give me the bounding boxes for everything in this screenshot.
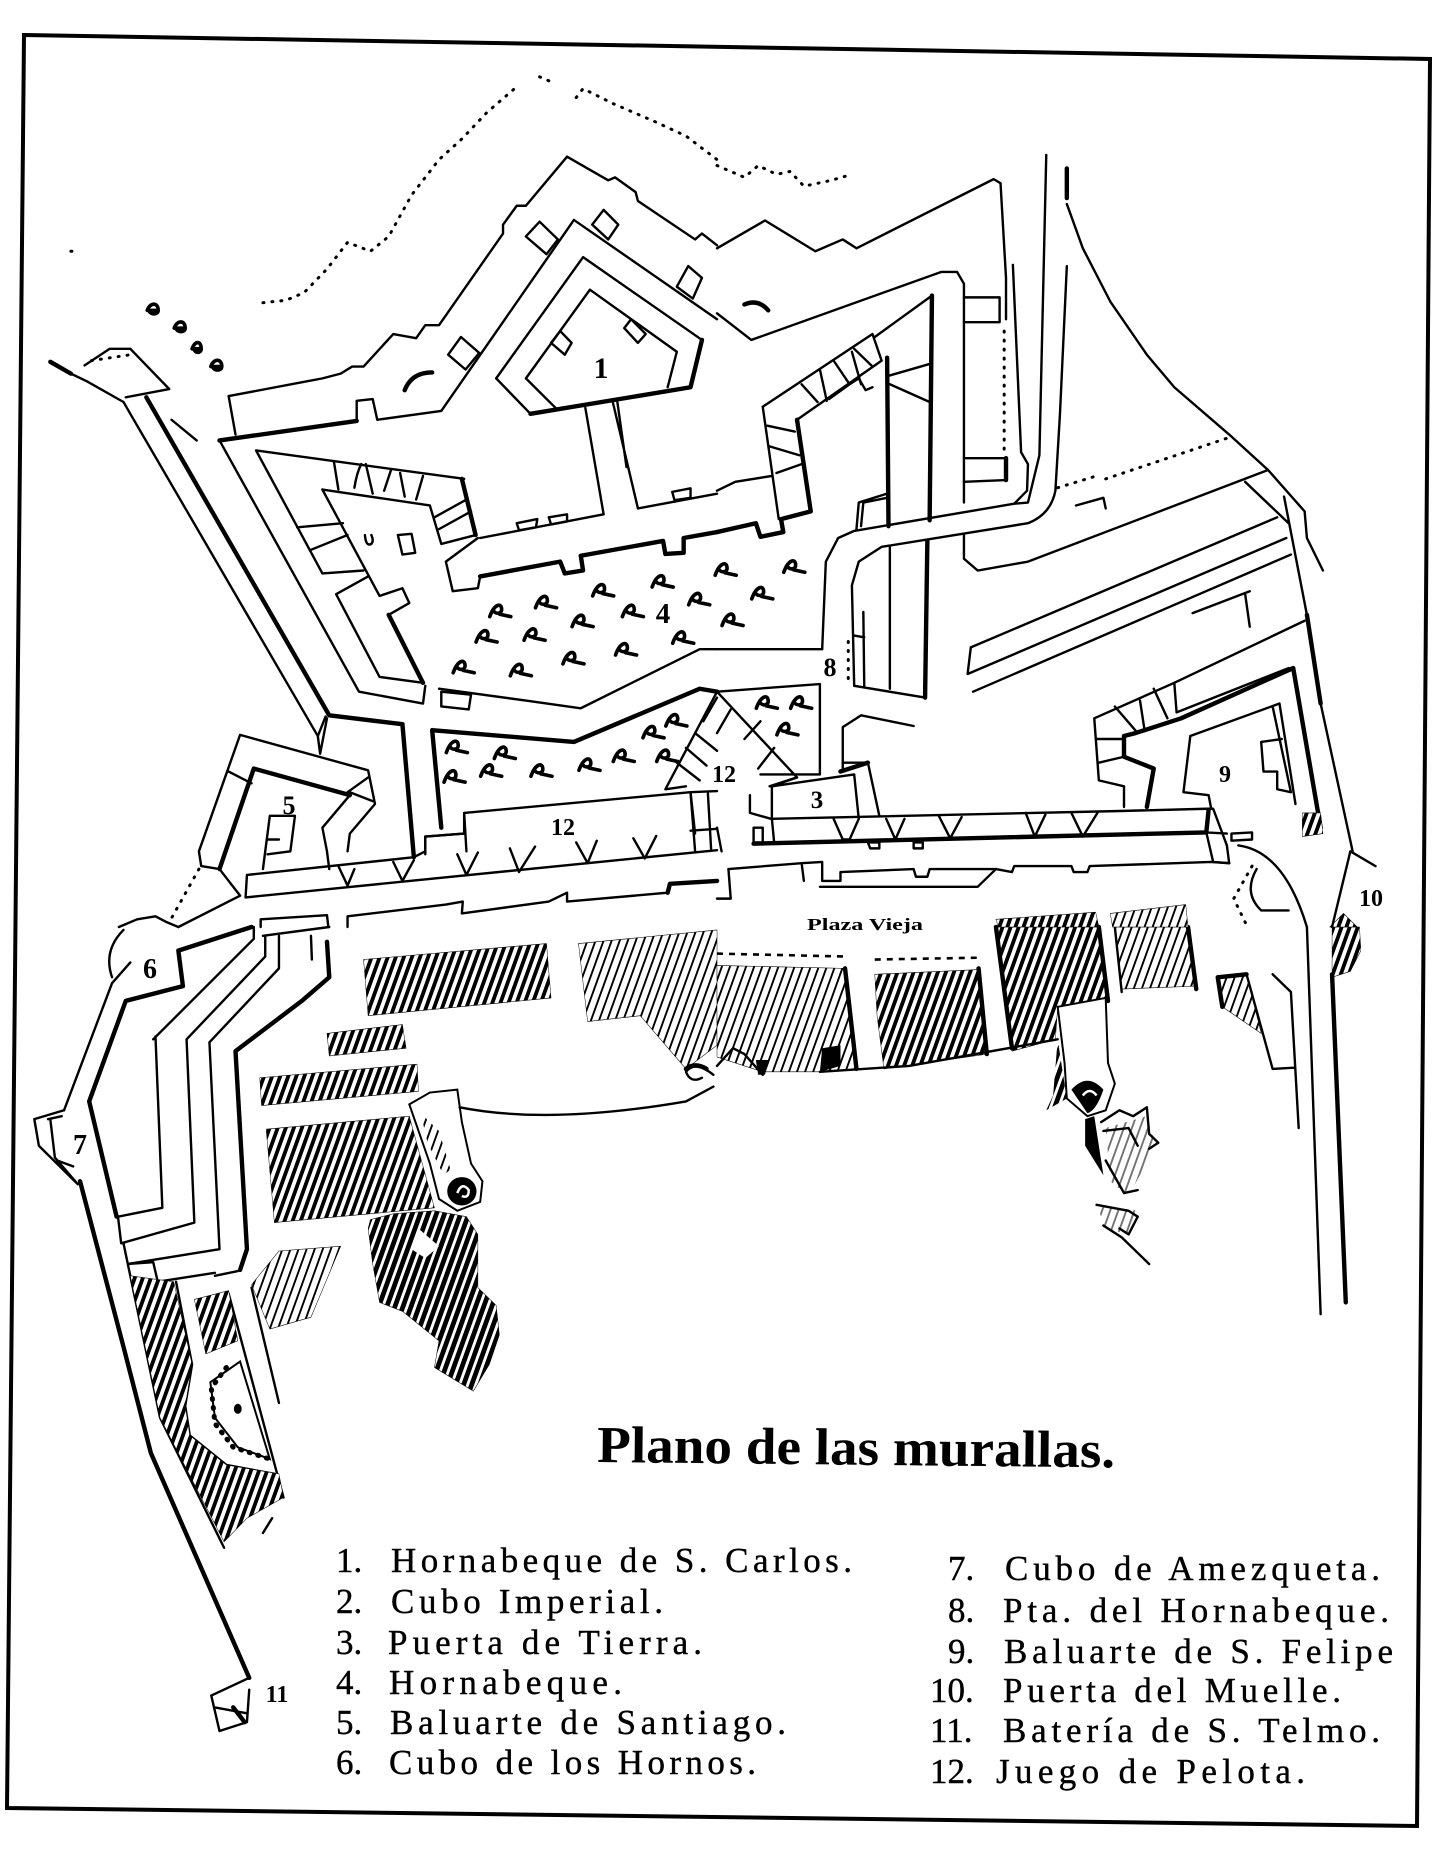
- legend: right column: 8.: [948, 1591, 974, 1630]
- legend: left column: 3.: [336, 1623, 362, 1662]
- legend: right column: 7.: [948, 1549, 974, 1588]
- legend: right column: Juego de Pelota.: [996, 1752, 1305, 1791]
- map number labels: 3: [811, 787, 823, 814]
- map number labels: 10: [1359, 886, 1383, 912]
- legend: right column: Cubo de Amezqueta.: [1005, 1549, 1380, 1588]
- legend: right column: 12.: [930, 1752, 974, 1791]
- map number labels: 5: [282, 791, 296, 820]
- map number labels: 12: [712, 762, 736, 788]
- legend: right column: 9.: [948, 1632, 974, 1671]
- legend: left column: 4.: [336, 1663, 362, 1702]
- legend: left column: Hornabeque.: [389, 1663, 622, 1702]
- city blocks, hatched: [130, 845, 1376, 1542]
- east quays and lines: [843, 204, 1353, 851]
- map number labels: 9: [1219, 762, 1231, 788]
- scroll and rubble, west: [368, 1065, 713, 1391]
- legend: right column: Pta. del Hornabeque.: [1003, 1591, 1389, 1630]
- legend: left column: Hornabeque de S. Carlos.: [391, 1541, 852, 1580]
- tree symbols: [147, 304, 812, 782]
- legend: right column: [930, 1549, 1393, 1791]
- map number labels: Plaza Vieja: [807, 915, 924, 934]
- map number labels: 11: [266, 1682, 288, 1708]
- legend: left column: 2.: [336, 1582, 362, 1621]
- scroll and rubble, east: [717, 998, 1158, 1264]
- map number labels: 8: [824, 653, 836, 682]
- legend: left column: 5.: [336, 1703, 362, 1742]
- legend: right column: Baluarte de S. Felipe: [1004, 1632, 1393, 1671]
- map number labels: 1: [594, 352, 608, 385]
- map number labels: 7: [73, 1130, 87, 1161]
- map number labels: 12: [551, 815, 575, 841]
- legend: right column: 11.: [930, 1711, 972, 1750]
- map number labels: 6: [143, 954, 157, 985]
- legend: left column: Baluarte de Santiago.: [390, 1703, 786, 1742]
- legend: left column: Cubo de los Hornos.: [389, 1743, 756, 1782]
- legend: right column: Batería de S. Telmo.: [1003, 1711, 1380, 1750]
- legend: right column: 10.: [930, 1671, 974, 1710]
- Hornabeque wall and bastions (4): [220, 296, 932, 709]
- legend: left column: Puerta de Tierra.: [388, 1623, 702, 1662]
- Baluarte de Santiago (5): [169, 735, 375, 922]
- map number labels: 4: [656, 598, 670, 630]
- road and Puerta del Hornabeque: [822, 155, 1067, 698]
- legend: right column: Puerta del Muelle.: [1003, 1671, 1341, 1710]
- legend: left column: Cubo Imperial.: [391, 1582, 663, 1621]
- legend: left column: [336, 1541, 852, 1782]
- Hornabeque de S. Carlos walls: [220, 157, 1006, 538]
- hill dotted contour: [71, 77, 852, 303]
- legend: left column: 1.: [336, 1541, 362, 1580]
- north-west road and tower: [50, 349, 414, 857]
- map number labels: [73, 352, 1383, 1708]
- title: Plano de las murallas.: [597, 1417, 1115, 1479]
- main city wall: [178, 684, 1252, 927]
- Juego de Pelota (12): [425, 689, 797, 851]
- Cubo de los Hornos and Amezqueta walls: [34, 916, 329, 1731]
- legend: left column: 6.: [336, 1743, 362, 1782]
- Baluarte de S. Felipe (9): [1094, 668, 1323, 837]
